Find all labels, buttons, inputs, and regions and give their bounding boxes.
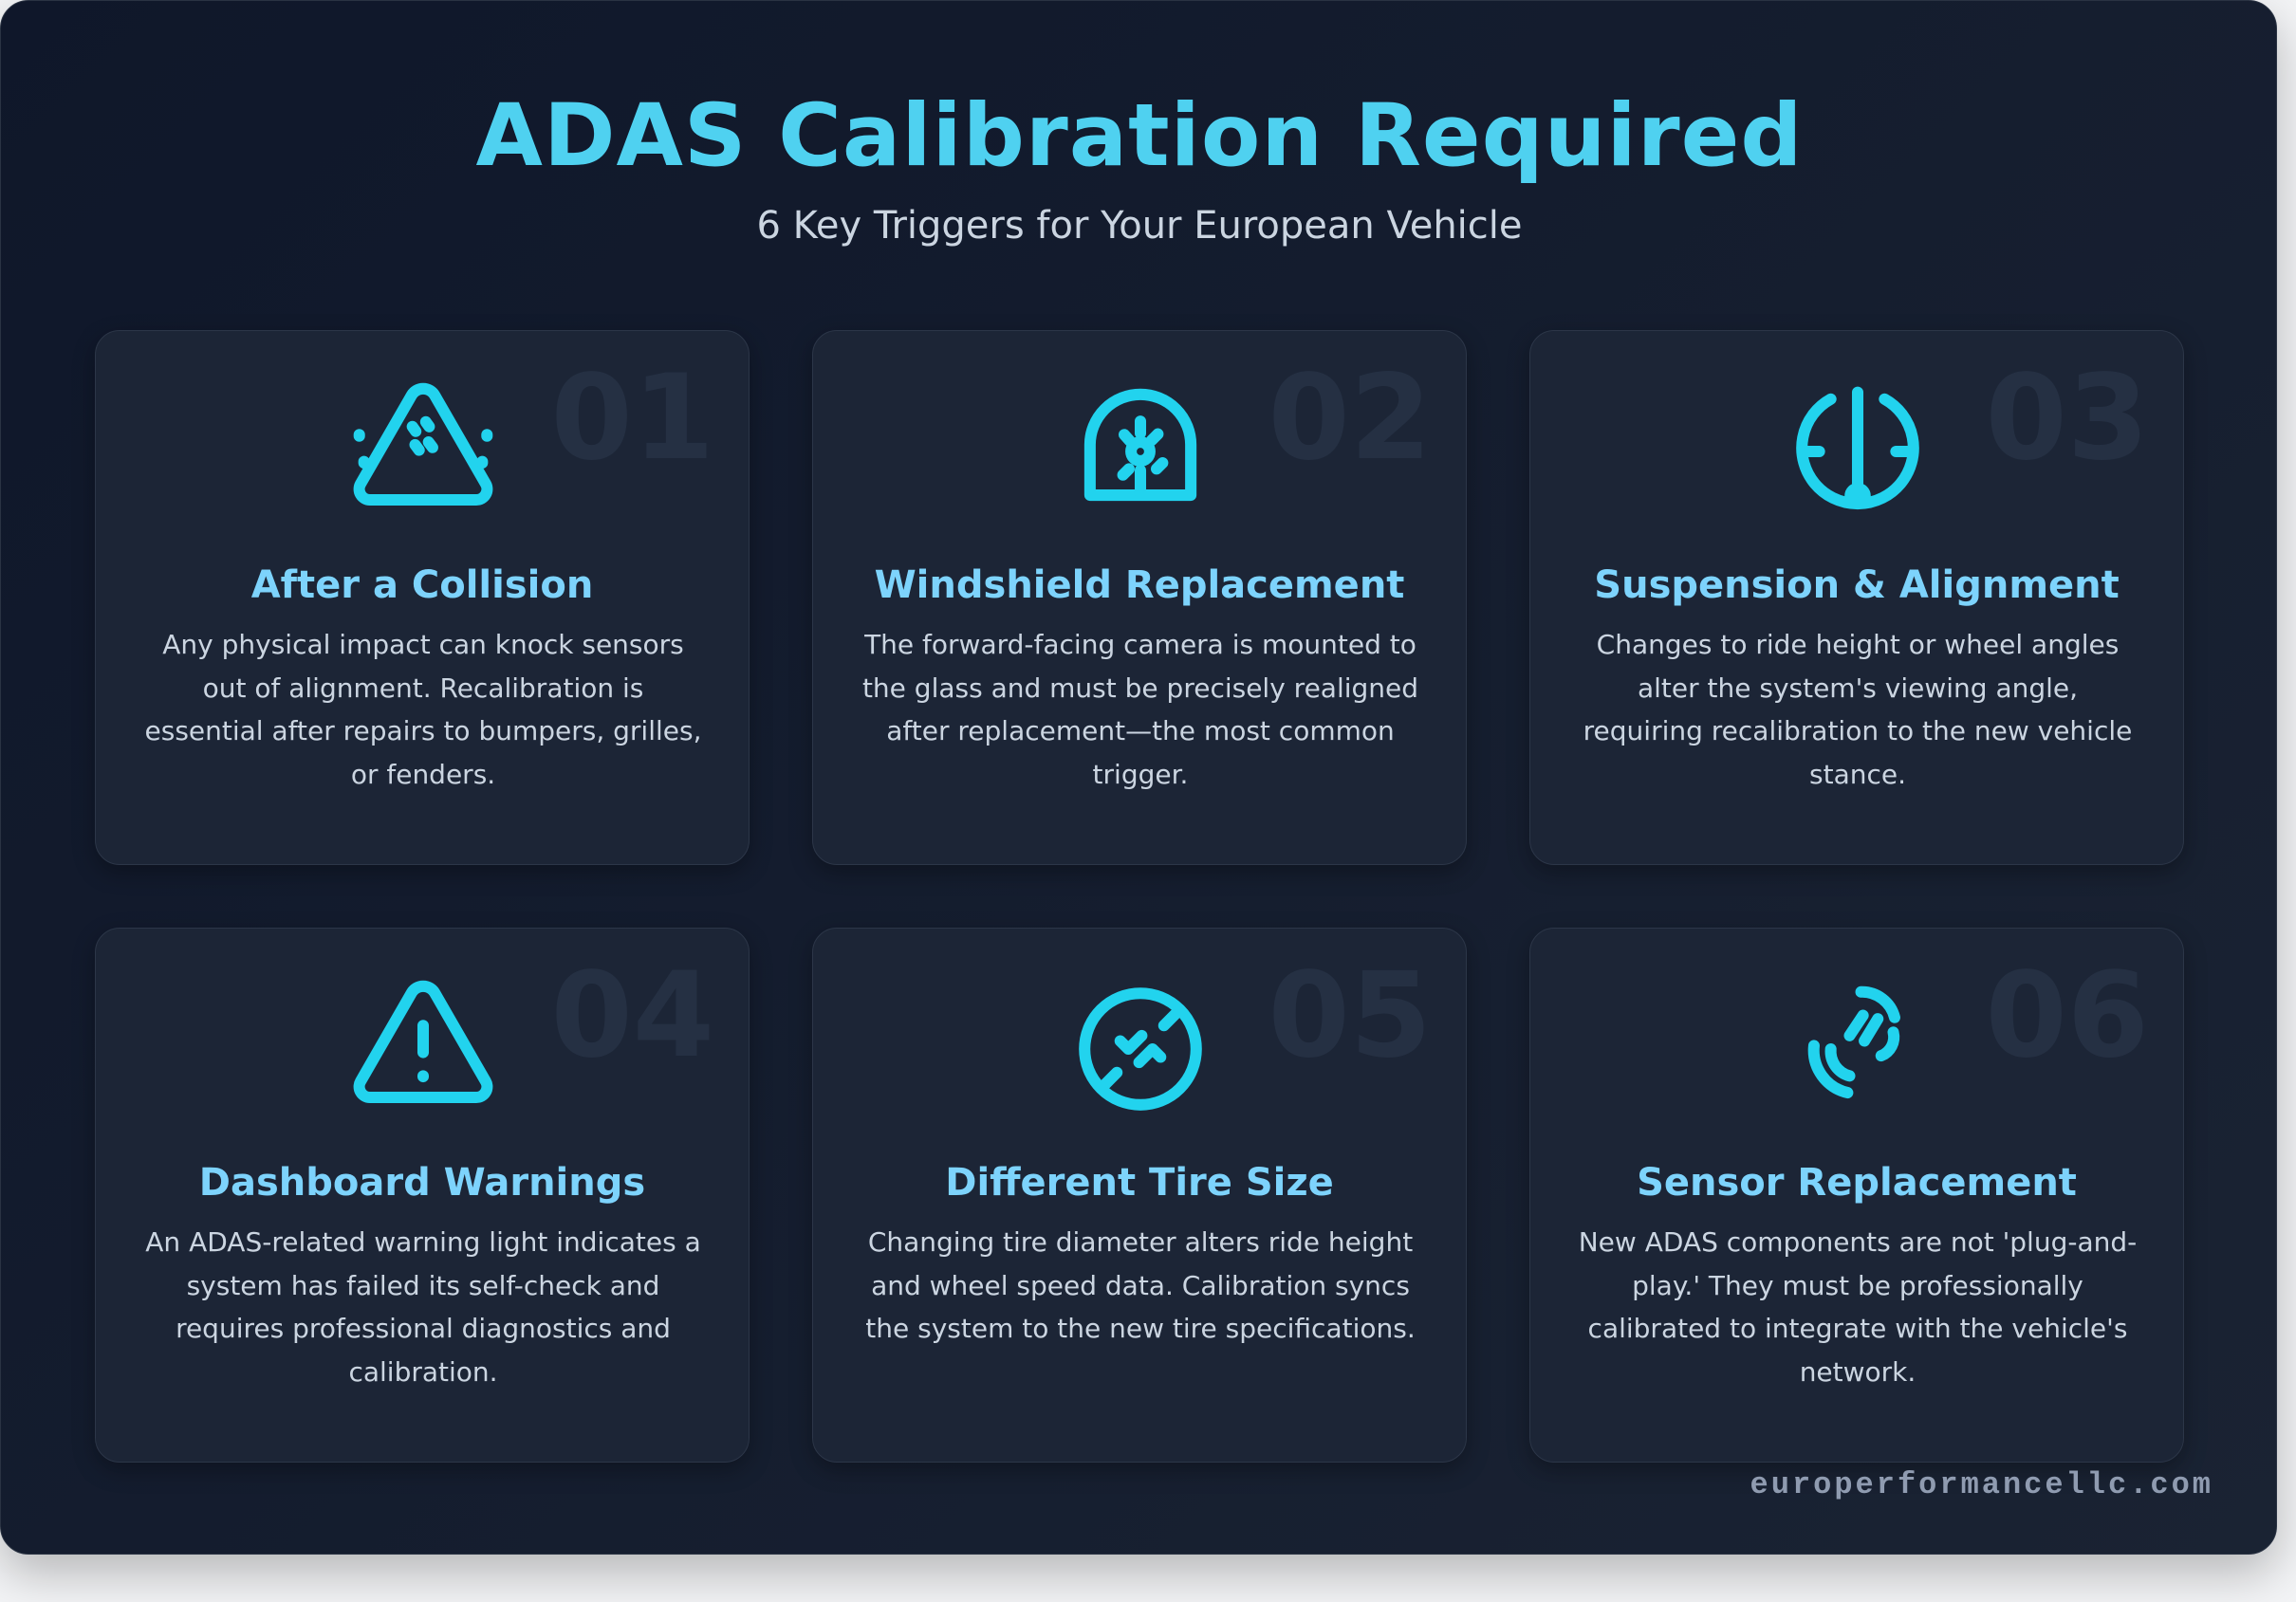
title: ADAS Calibration Required [476, 86, 1803, 186]
icon: warning [353, 981, 493, 1103]
body text: Changes to ride height or wheel angles alter the system's viewing angle, requiring recalibration to the new vehicle stance. [1583, 629, 2132, 789]
panel: dashboard warnings [95, 928, 750, 1463]
icon: collision triangle [353, 383, 493, 506]
number 05: 05 [1268, 948, 1432, 1084]
number 02: 02 [1268, 350, 1432, 487]
icon: tire gauge [1079, 987, 1202, 1111]
subtitle: 6 Key Triggers for Your European Vehicle [756, 204, 1522, 248]
heading: Windshield Replacement [875, 563, 1404, 607]
panel: windshield replacement [812, 330, 1467, 865]
heading: Sensor Replacement [1637, 1161, 2077, 1205]
icon: steering/alignment [1796, 387, 1919, 510]
panel: suspension [1529, 330, 2184, 865]
number 06: 06 [1985, 948, 2149, 1084]
heading: Dashboard Warnings [199, 1161, 645, 1205]
panel: tire size [812, 928, 1467, 1463]
body text: Any physical impact can knock sensors out of alignment. Recalibration is essential after repairs to bumpers, grilles, or fenders. [144, 629, 702, 789]
icon: windshield camera [1083, 389, 1197, 501]
number 01: 01 [550, 350, 714, 487]
heading: Suspension & Alignment [1594, 563, 2120, 607]
heading: Different Tire Size [945, 1161, 1334, 1205]
number 03: 03 [1985, 350, 2149, 487]
panel: after a collision [95, 330, 750, 865]
body text: The forward-facing camera is mounted to the glass and must be precisely realigned after replacement—the most common trigger. [862, 629, 1418, 789]
body text: Changing tire diameter alters ride height and wheel speed data. Calibration syncs the system to the new tire specifications. [865, 1226, 1416, 1344]
icon: sensor [1808, 986, 1900, 1098]
body text: An ADAS-related warning light indicates a system has failed its self-check and requires professional diagnostics and calibration. [145, 1226, 701, 1387]
number 04: 04 [550, 948, 714, 1084]
footer url: europerformancellc.com [1750, 1467, 2213, 1502]
heading: After a Collision [251, 563, 593, 607]
panel: sensor replacement [1529, 928, 2184, 1463]
body text: New ADAS components are not 'plug-and-play.' They must be professionally calibrated to integrate with the vehicle's network. [1579, 1226, 2137, 1387]
